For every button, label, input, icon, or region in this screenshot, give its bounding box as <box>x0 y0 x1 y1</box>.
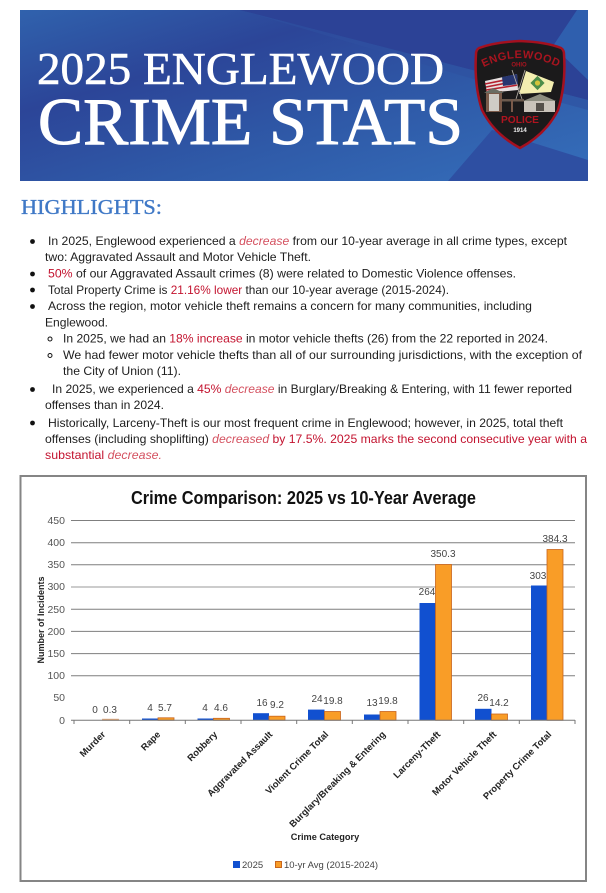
x axis category labels: Larceny-Theft <box>391 729 442 780</box>
bullet 4 <box>45 299 532 330</box>
badge text: Police: POLICE <box>501 114 539 126</box>
bullet 4: Englewood. <box>45 316 108 330</box>
data labels: 0 <box>92 705 98 716</box>
data labels: 350.3 <box>430 549 456 560</box>
sub-bullet circles <box>48 337 52 358</box>
bullet 1 <box>45 234 568 264</box>
bullet 6 <box>45 416 587 462</box>
x axis title: Crime Category <box>291 832 360 842</box>
badge text: 1914: 1914 <box>513 128 527 134</box>
data labels: 4 <box>202 703 208 714</box>
data labels: 19.8 <box>323 696 343 707</box>
y axis labels: 250 <box>47 604 65 616</box>
flag poles <box>512 70 525 99</box>
data labels: 14.2 <box>489 698 509 709</box>
badge text: Englewood: ENGLEWOOD <box>481 50 560 67</box>
data labels: 384.3 <box>542 534 568 545</box>
data labels: 5.7 <box>158 703 172 714</box>
y axis title: Number of Incidents <box>36 576 46 664</box>
legend: 10-yr Avg (2015-2024) <box>284 860 378 871</box>
y axis labels: 350 <box>47 559 65 571</box>
bullet 6: substantial decrease. <box>45 448 162 462</box>
highlights heading: HIGHLIGHTS: <box>21 195 162 219</box>
bullet 2: 50% of our Aggravated Assault crimes (8) were related to Domestic Violence offenses. <box>48 266 516 280</box>
y axis labels: 150 <box>47 648 65 660</box>
x axis category labels: Aggravated Assault <box>205 729 274 798</box>
x axis category labels: Violent Crime Total <box>263 729 330 796</box>
highlights bullet list <box>30 234 587 462</box>
data labels: 303 <box>530 571 547 582</box>
x axis <box>71 720 575 724</box>
building <box>484 88 556 112</box>
y axis labels: 300 <box>47 581 65 593</box>
data labels: 264 <box>419 587 436 598</box>
data labels: 4.6 <box>214 703 228 714</box>
x axis category labels: Motor Vehicle Theft <box>429 729 498 798</box>
title line 1: 2025 ENGLEWOOD <box>37 43 444 94</box>
y axis labels: 0 <box>59 715 65 727</box>
data labels: 19.8 <box>378 696 398 707</box>
y axis labels: 400 <box>47 537 65 549</box>
bullet 3: Total Property Crime is 21.16% lower than our 10-year average (2015-2024). <box>48 283 449 297</box>
bullet 5: offenses than in 2024. <box>45 398 164 412</box>
bullet 4: Across the region, motor vehicle theft remains a concern for many communities, including <box>48 299 532 313</box>
y axis labels: 200 <box>47 626 65 638</box>
bullet 5: In 2025, we experienced a 45% decrease in Burglary/Breaking & Entering, with 11 fewer reported <box>52 382 572 396</box>
10-year average bars <box>102 550 563 720</box>
data labels <box>92 534 568 716</box>
data labels: 16 <box>256 698 268 709</box>
2025 bars <box>142 586 547 720</box>
data labels: 0.3 <box>103 705 117 716</box>
y axis labels <box>47 515 65 727</box>
x axis category labels <box>77 728 553 829</box>
American flag <box>485 74 518 93</box>
sub-bullet 2: We had fewer motor vehicle thefts than all of our surrounding jurisdictions, with the exception of <box>63 348 583 362</box>
sub-bullet 2 <box>63 348 583 378</box>
y axis labels: 450 <box>47 515 65 527</box>
bullet 5 <box>45 382 572 412</box>
police badge <box>474 40 566 150</box>
sub-bullet 1: In 2025, we had an 18% increase in motor vehicle thefts (26) from the 22 reported in 2024. <box>63 332 548 346</box>
data labels: 24 <box>311 694 323 705</box>
data labels: 13 <box>366 698 378 709</box>
bullet 6: Historically, Larceny-Theft is our most frequent crime in Englewood; however, in 2025, total theft <box>48 416 564 430</box>
data labels: 26 <box>477 693 489 704</box>
badge text: Ohio: OHIO <box>511 62 527 68</box>
y axis labels: 100 <box>47 670 65 682</box>
y axis labels: 50 <box>53 692 65 704</box>
chart title: Crime Comparison: 2025 vs 10-Year Average <box>131 488 476 508</box>
chart panel <box>20 476 586 881</box>
gridlines <box>71 520 575 676</box>
legend: 2025 <box>242 860 263 871</box>
x axis category labels: Robbery <box>185 728 220 763</box>
bullet 1: two: Aggravated Assault and Motor Vehicle Theft. <box>45 250 311 264</box>
bullet 6: offenses (including shoplifting) decreased by 17.5%. 2025 marks the second consecutive year with a <box>45 432 587 446</box>
data labels: 4 <box>147 703 153 714</box>
x axis category labels: Property Crime Total <box>481 729 553 802</box>
x axis category labels: Rape <box>138 729 162 753</box>
data labels: 9.2 <box>270 700 284 711</box>
x axis category labels: Murder <box>77 728 108 759</box>
bullet 1: In 2025, Englewood experienced a decrease from our 10-year average in all crime types, except <box>48 234 568 248</box>
legend <box>233 860 378 871</box>
sub-bullet 2: the City of Union (11). <box>63 364 181 378</box>
title line 2: CRIME STATS <box>38 85 463 159</box>
x axis category labels: Burglary/Breaking & Entering <box>287 728 388 829</box>
Englewood flag <box>519 71 554 94</box>
bullet dots <box>30 239 35 425</box>
header banner <box>20 10 588 181</box>
